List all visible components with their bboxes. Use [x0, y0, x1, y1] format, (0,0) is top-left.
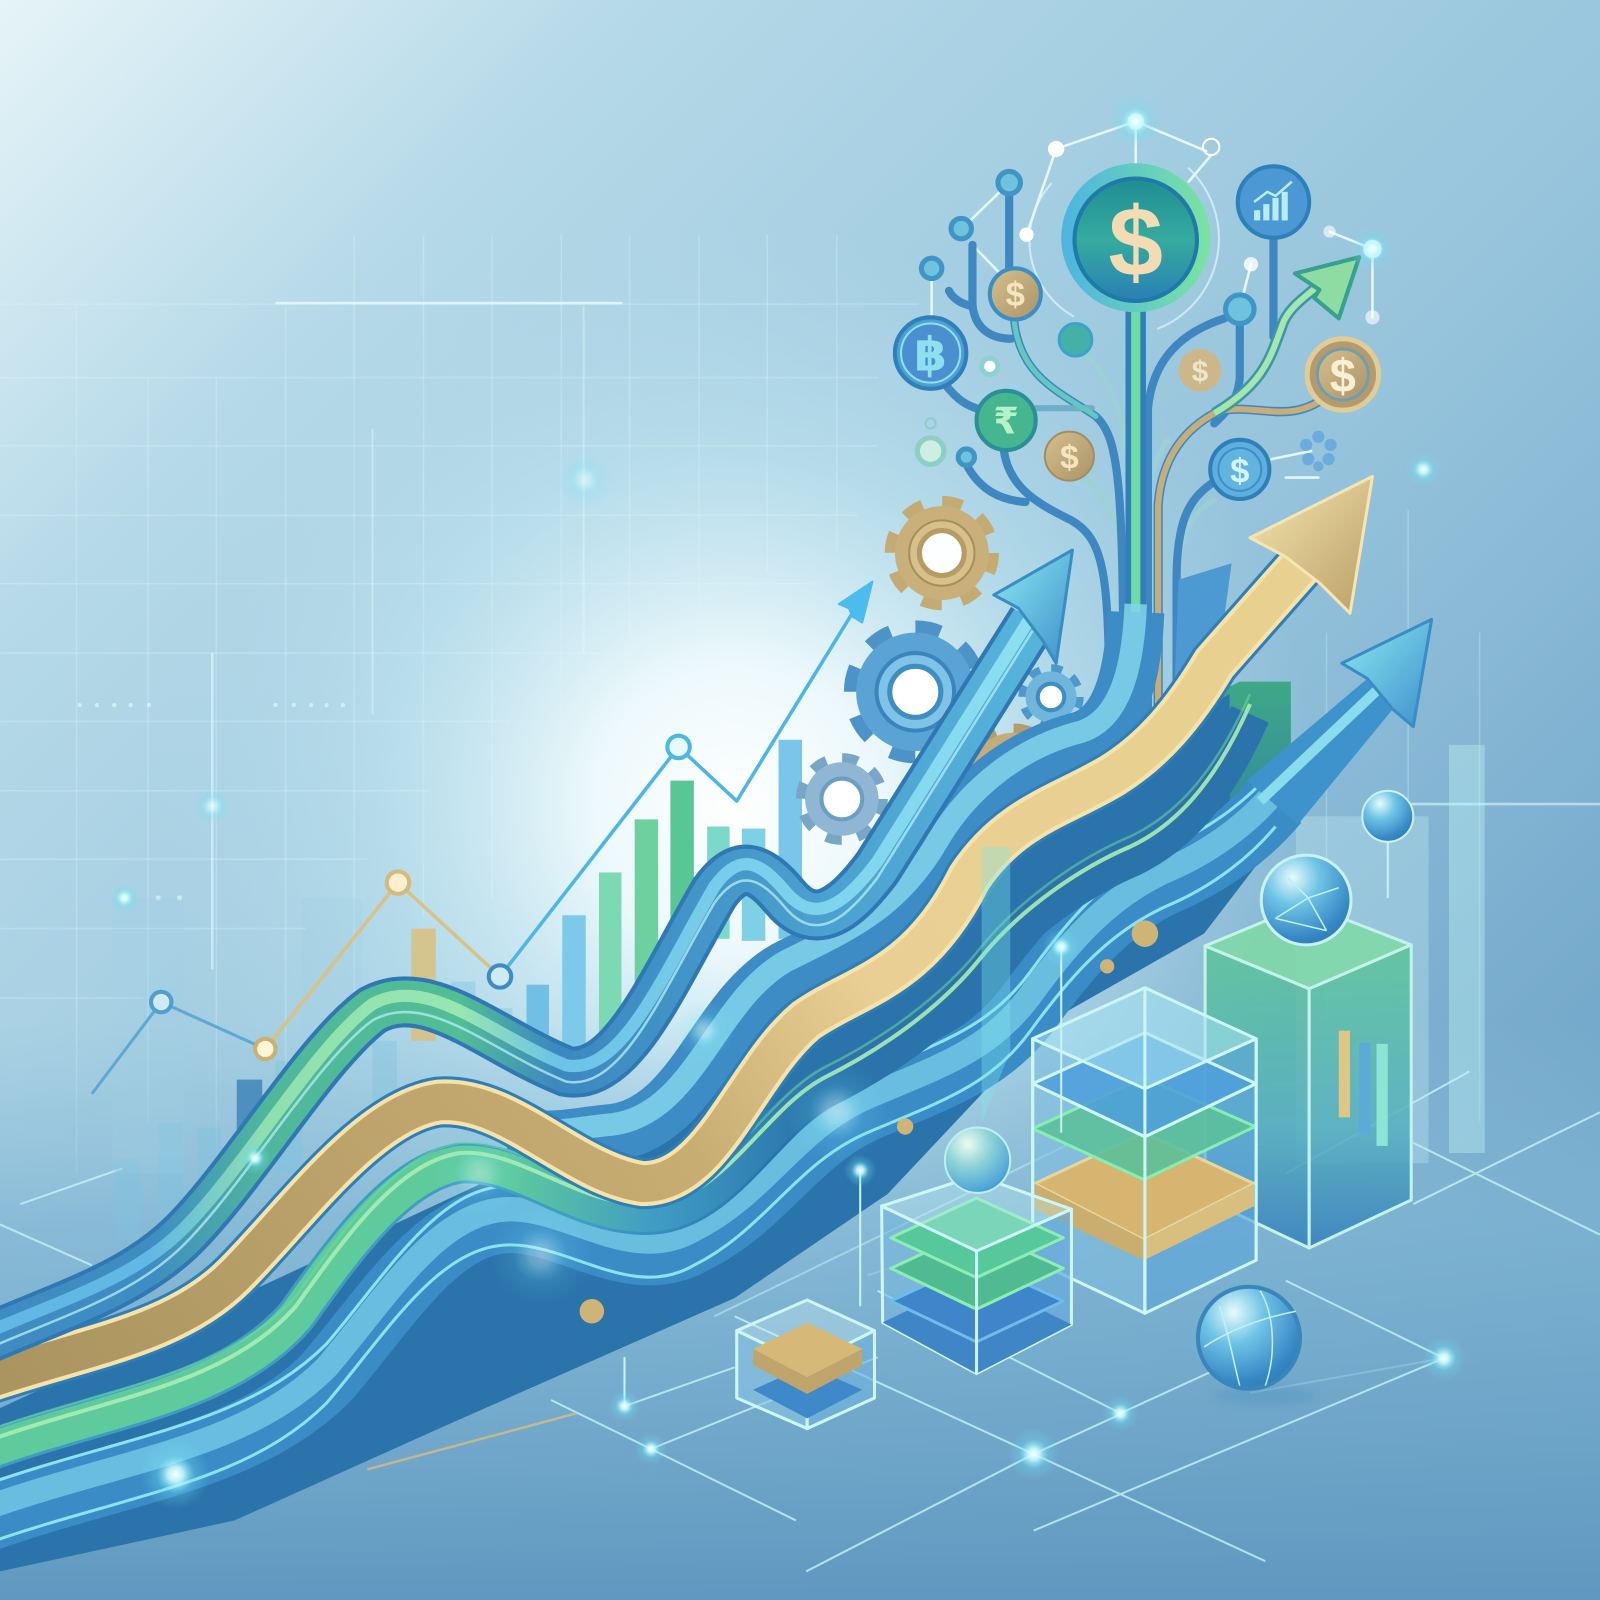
pale ring	[982, 358, 998, 374]
line chart with arrow	[92, 582, 872, 1094]
glass column	[982, 847, 1010, 1122]
rupee coin	[977, 391, 1036, 450]
arrow shaft: lower blue	[1247, 679, 1393, 824]
dark base mass	[0, 694, 1294, 1571]
gold coin	[990, 268, 1041, 319]
pale gold coin: $	[1192, 356, 1209, 389]
ribbon: gold	[0, 559, 1306, 1383]
large gold coin	[1307, 339, 1379, 410]
tiny gold glass box	[737, 1300, 874, 1429]
green back block	[1214, 682, 1291, 867]
pale gold coin	[1179, 349, 1221, 392]
coins and nodes	[895, 113, 1382, 499]
large gold coin: $	[1330, 350, 1356, 402]
arrow head: lower blue	[1342, 619, 1432, 727]
pale branches	[1084, 352, 1214, 561]
floor grid lines	[0, 1071, 1600, 1571]
trunk and branches	[944, 196, 1273, 735]
floor	[0, 1020, 1600, 1600]
rupee coin: ₹	[993, 401, 1019, 442]
ribbon: lower blue	[0, 767, 1276, 1546]
tall green box	[1205, 904, 1411, 1248]
arrow head: gold	[1250, 477, 1372, 613]
globe on tall box	[1261, 855, 1351, 945]
small nodes	[921, 171, 1254, 465]
pale target	[917, 418, 944, 464]
top right sphere	[1362, 791, 1413, 898]
white dots	[1019, 113, 1380, 324]
spheres	[945, 791, 1413, 1406]
main dollar coin: $	[1108, 187, 1163, 297]
gear: large blue	[854, 631, 977, 753]
gear: gold top	[893, 504, 991, 602]
ribbon: green	[0, 694, 1250, 1454]
gear: gold lower	[968, 731, 1058, 820]
gold beads	[580, 920, 1158, 1323]
gold coin lower: $	[1060, 439, 1079, 476]
large layered glass box	[1033, 988, 1256, 1313]
gears	[803, 504, 1079, 838]
sphere on small box	[945, 1128, 1010, 1193]
ribbon: top blue and green	[0, 614, 1033, 1352]
money tree	[932, 121, 1372, 735]
decorative node links	[932, 121, 1372, 478]
main dollar coin	[1061, 163, 1210, 312]
gear: small blue	[1023, 669, 1079, 724]
blue back blade	[1173, 563, 1232, 714]
small layered glass box	[882, 1176, 1071, 1373]
background bars	[112, 740, 1485, 1240]
blue dollar coin: $	[1230, 453, 1249, 491]
blue flower icon	[1300, 431, 1337, 471]
trunk	[1126, 306, 1146, 735]
blue dollar coin	[1210, 440, 1269, 499]
small green node	[1059, 323, 1092, 356]
baht coin: ฿	[914, 328, 947, 380]
gold coin: $	[1006, 276, 1025, 314]
floor globe	[1198, 1287, 1300, 1389]
gear: grey blue	[803, 760, 881, 838]
floor shadow	[1214, 1386, 1316, 1406]
green arrow branch	[1214, 281, 1324, 413]
gold coin lower	[1045, 432, 1094, 481]
baht coin	[895, 317, 966, 389]
arrow head: top blue	[994, 550, 1072, 663]
ribbon: upper blue	[510, 604, 1136, 1139]
glow lights	[108, 95, 1466, 1509]
chart coin	[1238, 166, 1309, 238]
